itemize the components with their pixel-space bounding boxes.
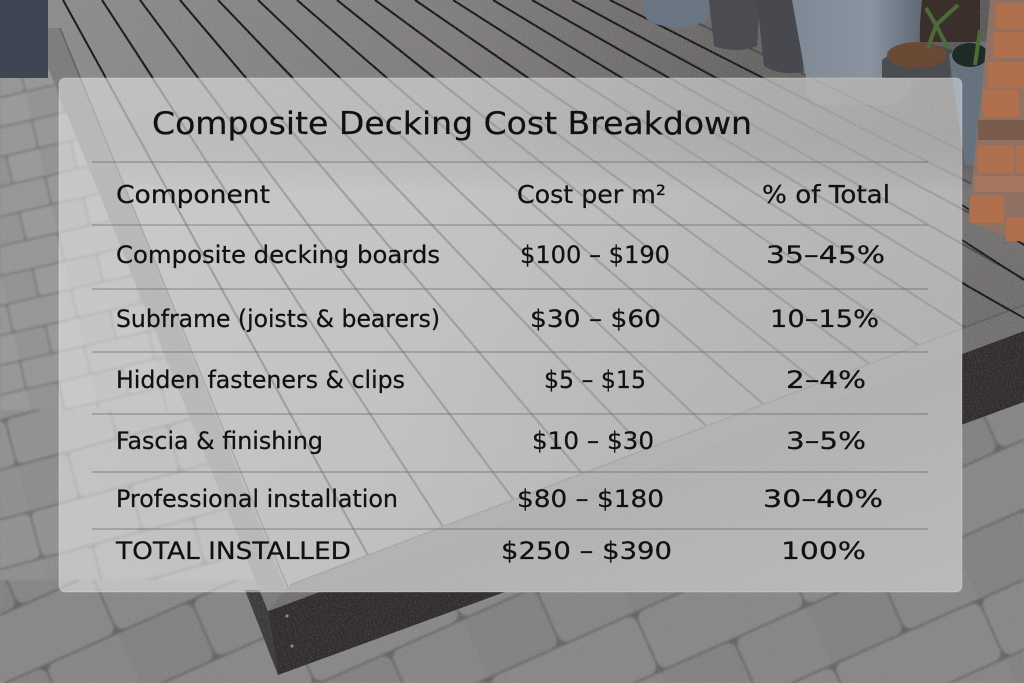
row: subframe <box>116 305 879 333</box>
row: composite decking boards: $100 – $190 <box>520 241 670 269</box>
row: professional installation: $80 – $180 <box>517 485 664 513</box>
row: total installed: $250 – $390 <box>501 537 672 565</box>
title: Composite Decking Cost Breakdown <box>152 106 752 142</box>
row: hidden fasteners: 2–4% <box>786 366 866 394</box>
row: composite decking boards: 35–45% <box>766 241 885 269</box>
table header <box>116 180 890 209</box>
table header: % of Total <box>762 180 890 209</box>
row: subframe: Subframe (joists & bearers) <box>116 305 440 333</box>
row: total installed: 100% <box>781 537 866 565</box>
row: composite decking boards: Composite decking boards <box>116 241 440 269</box>
deck fascia <box>245 331 1024 675</box>
row: composite decking boards <box>116 241 885 269</box>
row: subframe: $30 – $60 <box>530 305 661 333</box>
row: subframe: 10–15% <box>770 305 879 333</box>
row: professional installation: Professional installation <box>116 485 398 513</box>
row: professional installation <box>116 485 883 513</box>
row: hidden fasteners: $5 – $15 <box>544 366 646 394</box>
panel: translucent card <box>59 78 962 592</box>
planters <box>642 0 994 165</box>
row: fascia: 3–5% <box>786 427 866 455</box>
icon: dark wicker planter, top left <box>0 0 48 78</box>
row: fascia <box>116 427 866 455</box>
table rules <box>92 162 928 529</box>
row: fascia: $10 – $30 <box>532 427 654 455</box>
row: professional installation: 30–40% <box>763 485 883 513</box>
under-panel shaded ground <box>320 354 962 592</box>
row: total installed <box>115 537 866 565</box>
table header: Cost per m² <box>517 180 666 209</box>
row: hidden fasteners: Hidden fasteners & clips <box>116 366 405 394</box>
row: hidden fasteners <box>116 366 866 394</box>
table header: Component <box>116 180 270 209</box>
row: total installed: TOTAL INSTALLED <box>115 537 351 565</box>
row: fascia: Fascia & finishing <box>116 427 323 455</box>
brick wall <box>968 0 1024 243</box>
